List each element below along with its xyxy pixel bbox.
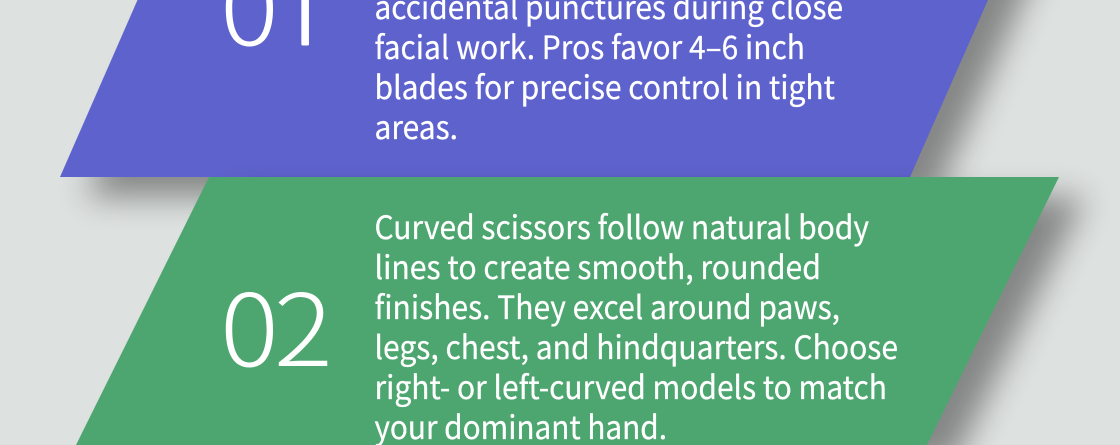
text block: step 01 description: areas.	[374, 103, 458, 149]
panel: step 02	[76, 177, 1059, 445]
number 02: 0	[220, 251, 279, 395]
text block: step 02 description: finishes. They excel around paws,	[374, 283, 840, 329]
text block: step 02 description: right- or left-curved models to match	[374, 363, 887, 409]
text block: step 01 description: blades for precise control in tight	[374, 63, 835, 109]
number 02: 2	[274, 251, 333, 395]
text block: step 02 description: legs, chest, and hindquarters. Choose	[374, 323, 898, 369]
text block: step 02 description	[374, 203, 898, 445]
text block: step 01 description	[374, 0, 843, 149]
text block: step 02 description: lines to create smooth, rounded	[374, 243, 821, 289]
panel: step 01	[60, 0, 1014, 177]
text block: step 01 description: facial work. Pros favor 4–6 inch	[374, 23, 805, 69]
text block: step 02 description: Curved scissors follow natural body	[374, 203, 869, 249]
